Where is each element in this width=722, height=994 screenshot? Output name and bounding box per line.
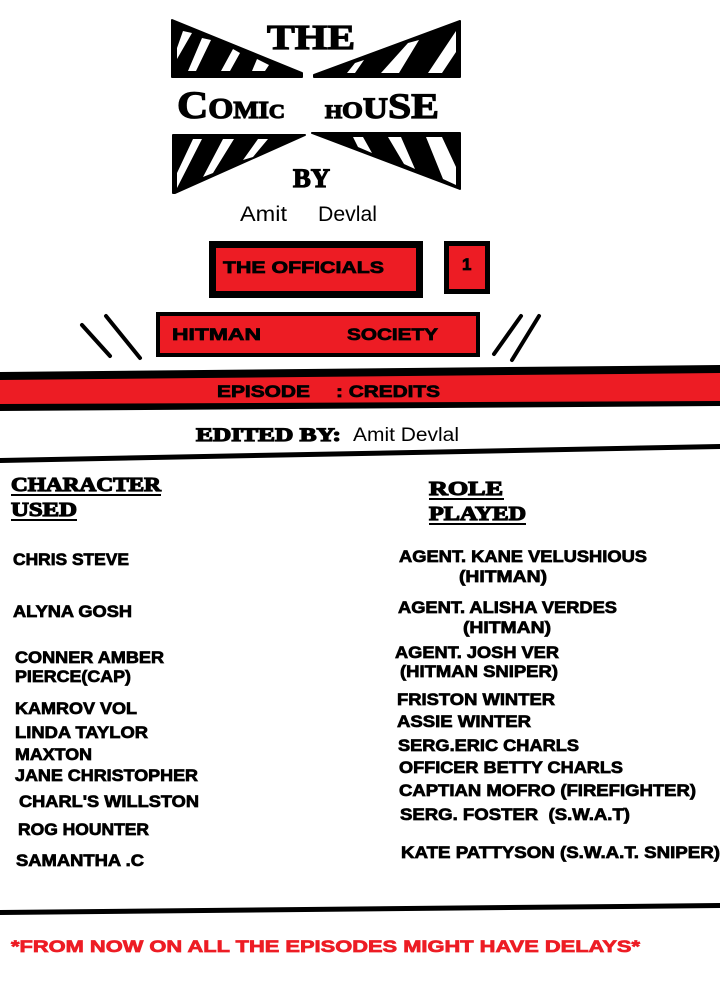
byline name — [240, 203, 377, 226]
role names — [395, 547, 720, 862]
heading: house: HOUSE — [325, 86, 439, 126]
role names: FRISTON WINTER — [397, 690, 555, 709]
role names: CAPTIAN MOFRO (FIREFIGHTER) — [399, 781, 696, 800]
panel: the officials — [212, 244, 420, 294]
editor credit — [196, 425, 459, 446]
role names: AGENT. ALISHA VERDES — [398, 598, 617, 617]
character names — [13, 550, 199, 870]
editor credit: EDITED BY: — [196, 425, 341, 446]
heading: character used: USED — [11, 499, 77, 521]
panel: hitman society — [158, 314, 478, 355]
icon: left emphasis marks — [82, 316, 140, 358]
heading: character used — [11, 474, 162, 521]
role names: SERG. FOSTER (S.W.A.T) — [400, 805, 630, 824]
character names: JANE CHRISTOPHER — [15, 766, 198, 785]
role names: (HITMAN) — [459, 567, 547, 586]
banner: episode credits: EPISODE — [217, 382, 310, 401]
byline name: Amit — [240, 203, 287, 226]
icon: right emphasis marks — [494, 316, 539, 360]
character names: ROG HOUNTER — [18, 820, 149, 839]
editor credit: Amit Devlal — [353, 425, 459, 446]
character names: MAXTON — [15, 745, 92, 764]
role names: (HITMAN SNIPER) — [400, 662, 558, 681]
character names: LINDA TAYLOR — [15, 723, 148, 742]
role names: ASSIE WINTER — [397, 712, 531, 731]
role names: KATE PATTYSON (S.W.A.T. SNIPER) — [401, 843, 720, 862]
icon: top left wedge — [172, 20, 302, 77]
role names: AGENT. JOSH VER — [395, 643, 559, 662]
character names: ALYNA GOSH — [13, 602, 132, 621]
role names: (HITMAN) — [463, 618, 551, 637]
byline label: BY — [293, 164, 330, 193]
panel: the officials: THE OFFICIALS — [223, 258, 384, 277]
heading: role played — [429, 478, 526, 525]
character names: PIERCE(CAP) — [15, 667, 131, 686]
heading: the: THE — [267, 18, 355, 57]
character names: CHARL'S WILLSTON — [19, 792, 199, 811]
character names: KAMROV VOL — [15, 699, 137, 718]
panel: hitman society: SOCIETY — [347, 325, 439, 344]
byline name: Devlal — [318, 203, 377, 226]
banner: episode credits — [0, 365, 720, 411]
column: character used — [11, 474, 199, 870]
character names: CONNER AMBER — [15, 648, 164, 667]
footer notice: *FROM NOW ON ALL THE EPISODES MIGHT HAVE DELAYS* — [11, 937, 640, 956]
column: role played — [395, 478, 720, 862]
banner: episode credits: : CREDITS — [336, 382, 440, 401]
icon: bottom left wedge — [173, 135, 305, 193]
heading: character used: CHARACTER — [11, 474, 162, 496]
panel: issue number: 1 — [462, 255, 471, 274]
role names: OFFICER BETTY CHARLS — [399, 758, 623, 777]
panel: issue number — [446, 244, 488, 292]
role names: AGENT. KANE VELUSHIOUS — [399, 547, 647, 566]
icon: bottom right wedge — [312, 133, 460, 189]
character names: CHRIS STEVE — [13, 550, 129, 569]
heading: comic: COMIC — [177, 84, 285, 127]
logo: the comic house — [172, 18, 460, 226]
panel: hitman society: HITMAN — [172, 325, 261, 344]
heading: role played: PLAYED — [429, 503, 526, 525]
icon: top right wedge — [314, 21, 460, 77]
role names: SERG.ERIC CHARLS — [398, 736, 579, 755]
character names: SAMANTHA .C — [16, 851, 144, 870]
heading: role played: ROLE — [429, 478, 503, 500]
